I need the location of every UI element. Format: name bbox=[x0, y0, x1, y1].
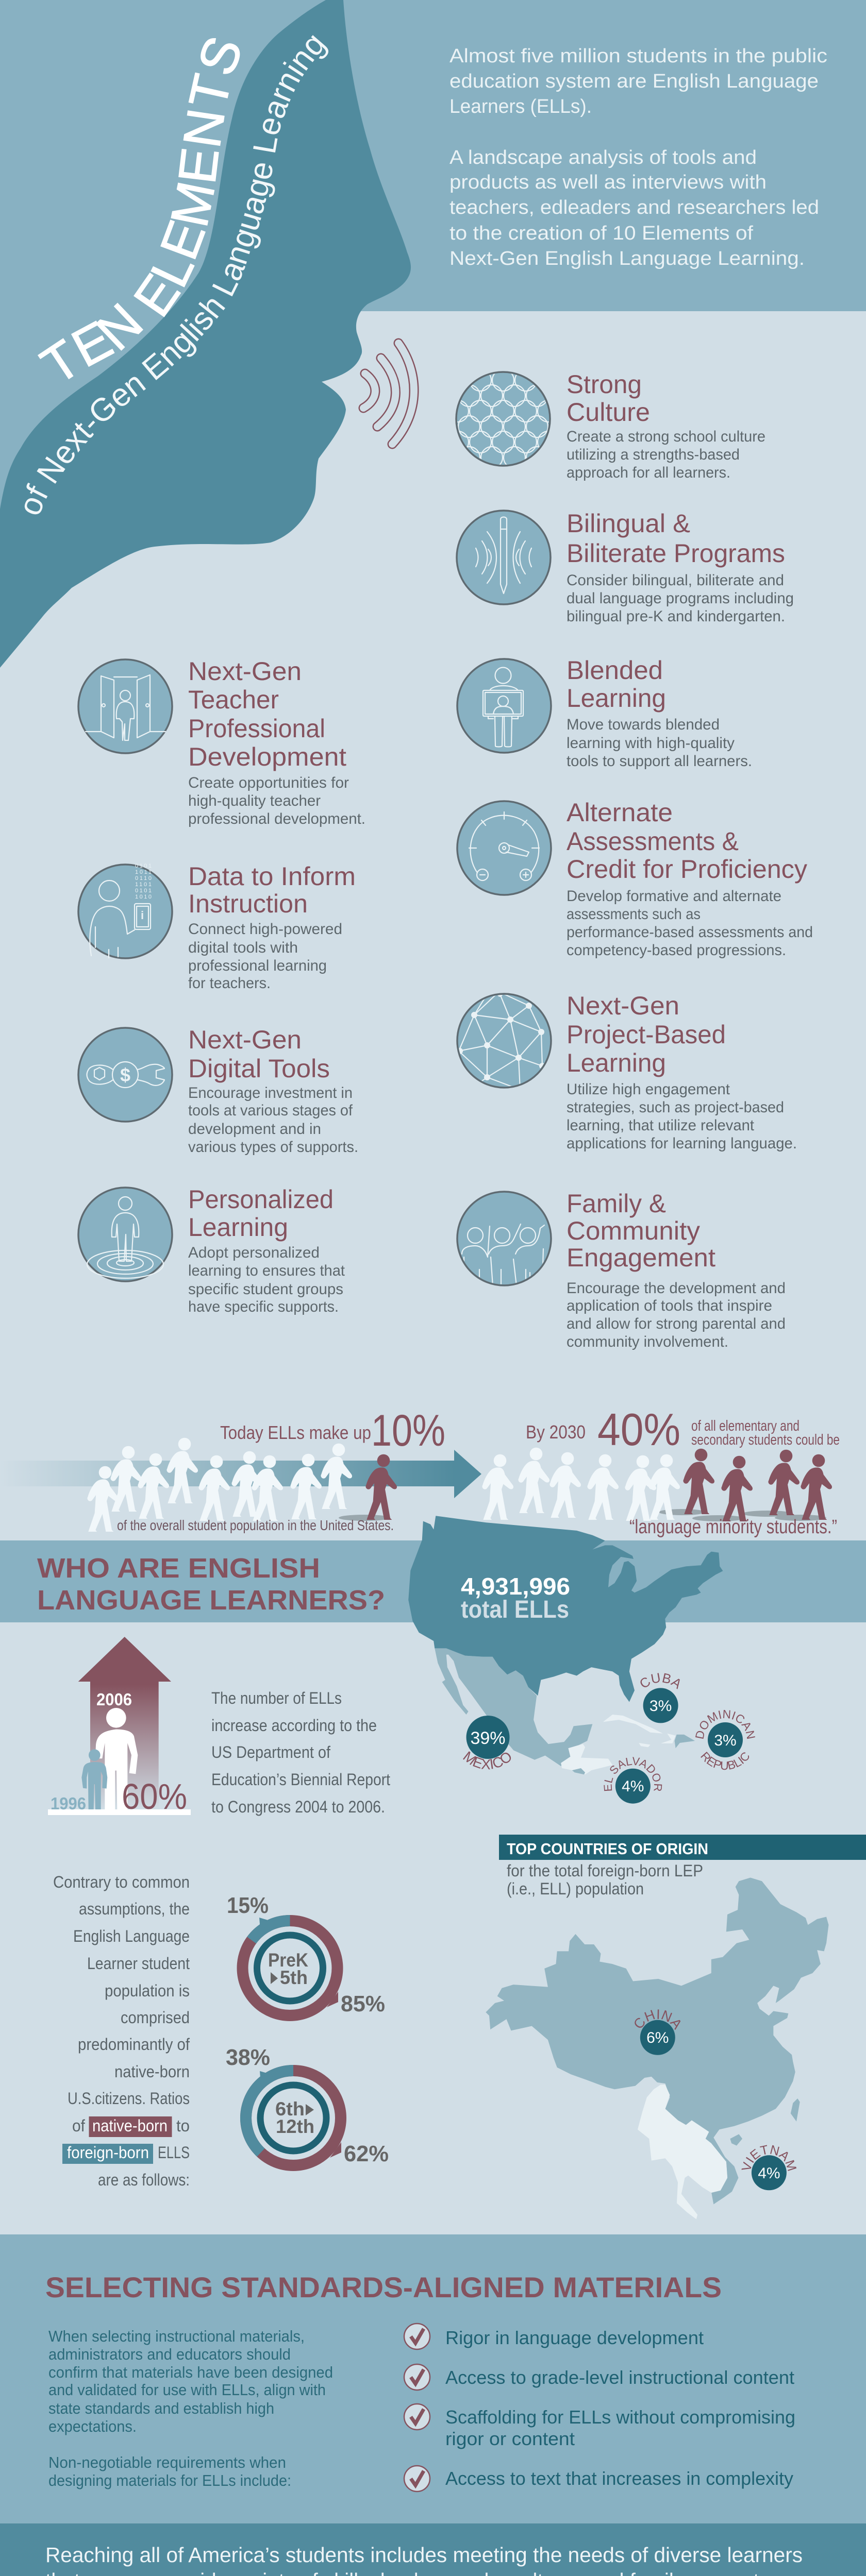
panel: strong culture bbox=[447, 369, 765, 481]
panel: alternate assessments and credit for proficiency: assessments such as bbox=[567, 906, 701, 923]
panel: next-gen project-based learning: learning, that utilize relevant bbox=[567, 1117, 755, 1134]
map: china and southeast asia bbox=[486, 1878, 829, 2219]
header bar: top countries of origin: TOP COUNTRIES OF ORIGIN bbox=[507, 1840, 708, 1858]
panel: family and community engagement: Family & bbox=[567, 1189, 666, 1218]
intro text: Learners (ELLs). bbox=[449, 96, 592, 117]
panel: alternate assessments and credit for proficiency: Alternate bbox=[567, 798, 673, 827]
panel: closing statement bbox=[0, 2523, 866, 2576]
badge: dominican republic 3 percent: 3% bbox=[714, 1732, 737, 1749]
text: native-born ratios: to bbox=[176, 2116, 190, 2135]
panel: alternate assessments and credit for proficiency bbox=[457, 798, 813, 959]
icon: check 1 bbox=[404, 2324, 430, 2349]
text: native-born ratios: are as follows: bbox=[98, 2171, 190, 2189]
icon: person with tablet and binary data: 0101 bbox=[135, 888, 152, 894]
text: native-born ratios: native-born bbox=[92, 2116, 168, 2135]
text: native-born ratios: Contrary to common bbox=[53, 1873, 190, 1891]
header band bbox=[0, 0, 866, 520]
badge: dominican republic 3 percent: REPUBLIC bbox=[701, 1752, 750, 1770]
heading: who are english language learners: LANGUAGE LEARNERS? bbox=[37, 1585, 385, 1616]
heading: SELECTING STANDARDS-ALIGNED MATERIALS bbox=[45, 2271, 722, 2303]
panel: data to inform instruction bbox=[78, 862, 356, 992]
panel: next-gen project-based learning: Next-Gen bbox=[567, 991, 679, 1020]
panel: next-gen teacher professional development: high-quality teacher bbox=[188, 792, 321, 809]
stat: today 10 percent: of the overall student population in the United States. bbox=[117, 1517, 394, 1533]
intro text: to the creation of 10 Elements of bbox=[449, 223, 753, 244]
people 2030: 40 percent bbox=[482, 1448, 832, 1521]
panel: selecting standards-aligned materials bbox=[0, 2234, 866, 2523]
stat: today 10 percent bbox=[117, 1406, 445, 1533]
panel: bilingual and biliterate programs: bilingual pre-K and kindergarten. bbox=[567, 608, 785, 625]
icon: person holding screen bbox=[457, 659, 551, 753]
intro text bbox=[449, 45, 827, 269]
icon: person in doorway bbox=[78, 659, 172, 753]
panel: next-gen teacher professional development bbox=[78, 657, 365, 827]
stat: by 2030 40 percent: of all elementary and bbox=[691, 1418, 800, 1434]
panel: personalized learning: learning to ensures that bbox=[188, 1262, 345, 1279]
panel: alternate assessments and credit for proficiency: Credit for Proficiency bbox=[567, 855, 807, 884]
panel: family and community engagement: and allow for strong parental and bbox=[567, 1315, 786, 1332]
left text block: designing materials for ELLs include: bbox=[48, 2471, 291, 2489]
panel: blended learning: Learning bbox=[567, 684, 666, 713]
donut chart: prek to 5th: 15% bbox=[227, 1893, 269, 1918]
panel: personalized learning: Personalized bbox=[188, 1185, 334, 1214]
panel: data to inform instruction: Data to Inform bbox=[188, 862, 356, 891]
donut chart: prek to 5th bbox=[227, 1893, 385, 2016]
panel: family and community engagement: Community bbox=[567, 1216, 700, 1245]
panel: next-gen teacher professional development: Development bbox=[188, 742, 346, 771]
icon: person with tablet and binary data: 1010 bbox=[135, 894, 152, 900]
text: number of ELLs bbox=[211, 1689, 390, 1816]
text: foreign-born population bbox=[507, 1861, 703, 1898]
stat: by 2030 40 percent: By 2030 bbox=[526, 1421, 586, 1443]
panel: personalized learning: Adopt personalized bbox=[188, 1244, 320, 1261]
panel: next-gen project-based learning: applications for learning language. bbox=[567, 1135, 797, 1152]
header bar: top countries of origin bbox=[499, 1835, 866, 1860]
checklist text: Access to text that increases in complexity bbox=[445, 2468, 793, 2489]
panel: family and community engagement: community involvement. bbox=[567, 1333, 728, 1350]
panel: strong culture: Create a strong school culture bbox=[567, 428, 765, 445]
badge: cuba 3 percent: CUBA bbox=[640, 1673, 680, 1689]
stat: total ELLs: 4,931,996 bbox=[461, 1573, 570, 1600]
icon: network globe bbox=[457, 992, 551, 1090]
growth arrow with figures bbox=[48, 1637, 191, 1817]
donut chart: prek to 5th: 85% bbox=[341, 1991, 385, 2016]
badge: cuba 3 percent bbox=[640, 1673, 680, 1723]
intro text: Almost five million students in the public bbox=[449, 45, 827, 67]
left text block: administrators and educators should bbox=[48, 2345, 291, 2363]
panel: strong culture: approach for all learners. bbox=[567, 464, 730, 481]
panel: family and community engagement: application of tools that inspire bbox=[567, 1297, 772, 1314]
left text block: state standards and establish high bbox=[48, 2399, 274, 2417]
panel: personalized learning: specific student groups bbox=[188, 1281, 343, 1298]
donut chart: prek to 5th: 5th bbox=[280, 1967, 308, 1988]
badge: el salvador 4 percent bbox=[604, 1757, 662, 1804]
text: foreign-born population: (i.e., ELL) population bbox=[507, 1879, 644, 1898]
badge: mexico 39 percent: 39% bbox=[470, 1728, 506, 1748]
stat: today 10 percent: 10% bbox=[371, 1406, 445, 1455]
label 2006: 2006 bbox=[96, 1690, 132, 1709]
panel: next-gen project-based learning: Project-Based bbox=[567, 1020, 726, 1049]
badge: china 6 percent: 6% bbox=[646, 2029, 669, 2046]
text: number of ELLs: US Department of bbox=[211, 1743, 330, 1761]
icon: person with tablet and binary data: 0101 bbox=[135, 863, 152, 869]
base line bbox=[48, 1809, 191, 1815]
checklist bbox=[404, 2324, 795, 2492]
text: native-born ratios: ELLS bbox=[158, 2143, 190, 2162]
panel: alternate assessments and credit for proficiency: Assessments & bbox=[567, 827, 739, 856]
badge: dominican republic 3 percent: DOMINICAN bbox=[695, 1710, 755, 1739]
panel: personalized learning: Learning bbox=[188, 1213, 288, 1242]
badge: mexico 39 percent bbox=[463, 1716, 511, 1769]
heading: who are english language learners bbox=[37, 1553, 385, 1616]
stat: total ELLs bbox=[461, 1573, 570, 1623]
badge: vietnam 4 percent: 4% bbox=[758, 2165, 780, 2182]
icon: check 2 bbox=[404, 2364, 430, 2390]
icon: person standing in ripples bbox=[78, 1188, 172, 1281]
panel: alternate assessments and credit for proficiency: performance-based assessments and bbox=[567, 924, 813, 941]
left text block bbox=[48, 2327, 333, 2489]
panel: next-gen digital tools bbox=[78, 1025, 358, 1156]
panel: next-gen digital tools: Digital Tools bbox=[188, 1054, 330, 1083]
text: native-born ratios: predominantly of bbox=[78, 2035, 190, 2054]
badge: mexico 39 percent: MEXICO bbox=[463, 1751, 511, 1769]
icon: gauge dial bbox=[457, 801, 551, 895]
badge: china 6 percent bbox=[635, 2009, 680, 2055]
stat 60 percent: 60% bbox=[122, 1776, 187, 1817]
panel: family and community engagement bbox=[457, 1189, 786, 1350]
text: number of ELLs: to Congress 2004 to 2006. bbox=[211, 1798, 385, 1816]
panel: data to inform instruction: Instruction bbox=[188, 889, 308, 918]
panel: bilingual and biliterate programs bbox=[457, 509, 794, 625]
intro text: A landscape analysis of tools and bbox=[449, 147, 757, 168]
panel: bilingual and biliterate programs: Consider bilingual, biliterate and bbox=[567, 572, 784, 589]
panel: data to inform instruction: professional learning bbox=[188, 957, 327, 974]
icon: wrench with dollar sign: $ bbox=[120, 1064, 130, 1086]
left text block: and validated for use with ELLs, align with bbox=[48, 2381, 326, 2399]
icon: three people raising hands bbox=[457, 1192, 551, 1286]
badge: el salvador 4 percent: EL SALVADOR bbox=[604, 1757, 662, 1791]
badge: cuba 3 percent: 3% bbox=[649, 1698, 672, 1715]
stat: by 2030 40 percent bbox=[526, 1404, 840, 1538]
panel: data to inform instruction: Connect high-powered bbox=[188, 921, 342, 938]
intro text: products as well as interviews with bbox=[449, 172, 767, 193]
icon: wrench with dollar sign bbox=[78, 1028, 172, 1122]
band: who are english language learners bbox=[0, 1540, 866, 1622]
panel: closing statement: Reaching all of America’s students includes meeting the needs of diverse learners bbox=[45, 2543, 803, 2567]
checklist text: Scaffolding for ELLs without compromising bbox=[445, 2406, 795, 2428]
text: native-born ratios: English Language bbox=[73, 1927, 190, 1945]
panel: next-gen digital tools: tools at various stages of bbox=[188, 1102, 353, 1119]
panel: next-gen digital tools: Encourage investment in bbox=[188, 1084, 353, 1101]
panel: next-gen teacher professional development: Next-Gen bbox=[188, 657, 302, 686]
icon: overlapping circles bbox=[455, 371, 551, 467]
donut chart: 6th to 12th bbox=[226, 2045, 389, 2166]
subtitle on curve: of Next-Gen English Language Learning bbox=[25, 35, 329, 514]
stat: by 2030 40 percent: 40% bbox=[597, 1404, 680, 1455]
panel: strong culture: utilizing a strengths-based bbox=[567, 446, 740, 463]
panel: next-gen project-based learning bbox=[457, 991, 797, 1152]
badge: china 6 percent: CHINA bbox=[635, 2009, 680, 2030]
intro text: education system are English Language bbox=[449, 71, 819, 92]
panel: family and community engagement: Encourage the development and bbox=[567, 1280, 786, 1297]
text: native-born ratios: of bbox=[72, 2116, 85, 2135]
panel: next-gen teacher professional development: professional development. bbox=[188, 810, 365, 827]
checklist text: Access to grade-level instructional content bbox=[445, 2367, 794, 2388]
icon: person with tablet and binary data bbox=[78, 863, 172, 958]
text: native-born ratios: population is bbox=[105, 1981, 190, 2000]
icon: person with tablet and binary data: 1101 bbox=[135, 882, 152, 888]
panel: bilingual and biliterate programs: Biliterate Programs bbox=[567, 539, 785, 568]
donut chart: 6th to 12th: 38% bbox=[226, 2045, 270, 2070]
text: native-born ratios: Learner student bbox=[87, 1954, 190, 1973]
donut chart: 6th to 12th: 62% bbox=[344, 2141, 389, 2166]
text: native-born ratios bbox=[53, 1873, 190, 2189]
intro text: teachers, edleaders and researchers led bbox=[449, 197, 819, 218]
adult figure bbox=[95, 1708, 138, 1809]
left text block: Non-negotiable requirements when bbox=[48, 2453, 286, 2471]
panel: blended learning bbox=[457, 656, 752, 770]
icon: person with tablet and binary data: i bbox=[141, 909, 144, 922]
badge: vietnam 4 percent: VIETNAM bbox=[741, 2145, 797, 2171]
stat: total ELLs: total ELLs bbox=[461, 1596, 569, 1623]
panel: next-gen digital tools: Next-Gen bbox=[188, 1025, 302, 1054]
text: number of ELLs: Education’s Biennial Report bbox=[211, 1770, 390, 1789]
people today: 10 percent bbox=[87, 1438, 397, 1532]
panel: next-gen project-based learning: Utilize high engagement bbox=[567, 1081, 730, 1098]
intro text: Next-Gen English Language Learning. bbox=[449, 248, 805, 269]
badge: dominican republic 3 percent bbox=[695, 1710, 755, 1770]
panel: alternate assessments and credit for proficiency: Develop formative and alternate bbox=[567, 888, 781, 905]
checklist text bbox=[445, 2327, 795, 2489]
left text block: expectations. bbox=[48, 2417, 137, 2435]
panel: strong culture: Culture bbox=[567, 398, 650, 427]
icon: person with tablet and binary data: 0110 bbox=[135, 875, 152, 882]
text: native-born ratios: comprised bbox=[121, 2008, 190, 2027]
panel: blended learning: tools to support all learners. bbox=[567, 753, 752, 770]
donut chart: prek to 5th: PreK bbox=[268, 1950, 308, 1971]
icon: speech waves bbox=[363, 343, 414, 444]
panel: next-gen project-based learning: strategies, such as project-based bbox=[567, 1099, 784, 1116]
panel: blended learning: learning with high-quality bbox=[567, 735, 735, 752]
heading: who are english language learners: WHO ARE ENGLISH bbox=[37, 1553, 320, 1584]
panel: personalized learning bbox=[78, 1185, 345, 1315]
panel: next-gen digital tools: various types of supports. bbox=[188, 1139, 358, 1156]
arrow: timeline bbox=[0, 1450, 481, 1498]
badge: vietnam 4 percent bbox=[741, 2145, 797, 2191]
panel: next-gen digital tools: development and in bbox=[188, 1121, 321, 1138]
panel: alternate assessments and credit for proficiency: competency-based progressions. bbox=[567, 942, 786, 959]
text: native-born ratios: assumptions, the bbox=[79, 1900, 190, 1918]
text: native-born ratios: U.S.citizens. Ratios bbox=[68, 2089, 190, 2108]
label 1996: 1996 bbox=[51, 1794, 86, 1813]
left text block: confirm that materials have been designed bbox=[48, 2363, 333, 2381]
title: ten elements: TEN ELEMENTS bbox=[38, 38, 240, 379]
icon: pen with sound waves bbox=[457, 511, 551, 604]
panel: bilingual and biliterate programs: Bilingual & bbox=[567, 509, 690, 538]
panel: data to inform instruction: digital tools with bbox=[188, 939, 298, 956]
icon: person with tablet and binary data: 1011 bbox=[135, 869, 152, 875]
text: number of ELLs: The number of ELLs bbox=[211, 1689, 342, 1707]
panel: bilingual and biliterate programs: dual language programs including bbox=[567, 590, 794, 607]
donut chart: 6th to 12th: 6th bbox=[275, 2098, 305, 2120]
panel: next-gen teacher professional development: Professional bbox=[188, 714, 325, 743]
panel: personalized learning: have specific supports. bbox=[188, 1298, 339, 1315]
text: native-born ratios: foreign-born bbox=[67, 2143, 149, 2162]
left text block: When selecting instructional materials, bbox=[48, 2327, 305, 2345]
face silhouette bbox=[0, 0, 411, 668]
checklist text: Rigor in language development bbox=[445, 2327, 704, 2348]
icon: check 4 bbox=[404, 2466, 430, 2492]
map: north america bbox=[408, 1516, 723, 1774]
panel: next-gen project-based learning: Learning bbox=[567, 1048, 666, 1077]
panel: blended learning: Blended bbox=[567, 656, 663, 685]
stat: today 10 percent: Today ELLs make up bbox=[220, 1422, 371, 1443]
text: foreign-born population: for the total foreign-born LEP bbox=[507, 1861, 703, 1880]
checklist text: rigor or content bbox=[445, 2428, 575, 2449]
panel: data to inform instruction: for teachers. bbox=[188, 975, 271, 992]
donut chart: 6th to 12th: 12th bbox=[276, 2116, 314, 2137]
panel: blended learning: Move towards blended bbox=[567, 716, 720, 733]
icon: check 3 bbox=[404, 2404, 430, 2430]
badge: el salvador 4 percent: 4% bbox=[622, 1778, 644, 1795]
panel: family and community engagement: Engagement bbox=[567, 1243, 715, 1272]
panel: next-gen teacher professional development: Teacher bbox=[188, 685, 279, 714]
text: number of ELLs: increase according to the bbox=[211, 1716, 377, 1735]
text: native-born ratios: native-born bbox=[114, 2062, 190, 2081]
panel: strong culture: Strong bbox=[567, 370, 642, 399]
panel: next-gen teacher professional development: Create opportunities for bbox=[188, 774, 349, 791]
child figure bbox=[81, 1749, 107, 1809]
